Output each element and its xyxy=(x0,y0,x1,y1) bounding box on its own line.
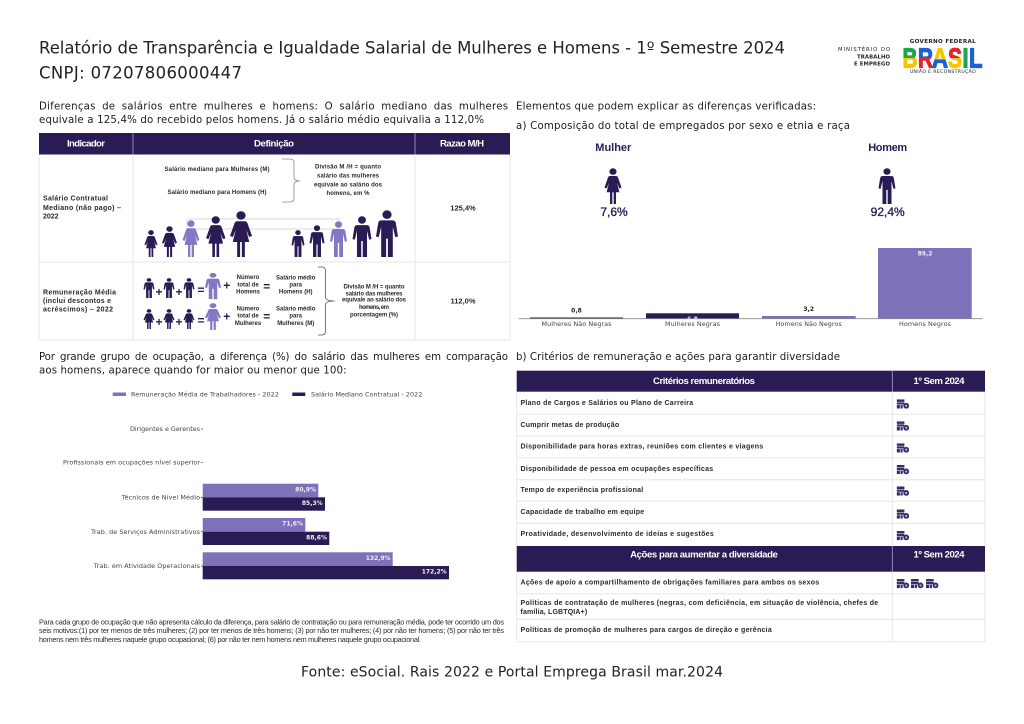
action rows: Políticas de promoção de mulheres para cargos de direção e gerência xyxy=(520,627,772,634)
definition: divisão M/H: salário das mulheres xyxy=(317,174,380,180)
row label: remuneração média: (inclui descontos e xyxy=(43,298,111,305)
panel: tabela de indicadores xyxy=(39,133,510,340)
footnote: Para cada grupo de ocupação que não apresenta cálculo da diferença, para salário de contratação ou para remuneração média, pode ter ocorrido um dos xyxy=(39,618,504,626)
criteria rows: Proatividade, desenvolvimento de ideias e sugestões xyxy=(520,531,714,538)
legend: Remuneração Média de Trabalhadores - 2022 xyxy=(131,390,279,398)
brace xyxy=(318,267,334,335)
definition: salário mediano labels: Salário mediano para Homens (H) xyxy=(168,190,266,196)
footnote: seis motivos:(1) por ter menos de três mulheres; (2) por ter menos de três homens; (3) por não ter mulheres; (4) por não ter homens; (5) por não ter três xyxy=(39,626,504,635)
formula: homens: + xyxy=(175,285,183,299)
text block: diferenças de salários xyxy=(39,100,508,126)
title: Relatório de Transparência e Igualdade Salarial de Mulheres e Homens - 1º Semestre 2024 xyxy=(39,38,785,58)
formula: mulheres: Mulheres (M) xyxy=(277,321,314,327)
text block: diferenças de salários: equivale a 125,4% do recebido pelos homens. Já o salário médio equivalia a 112,0% xyxy=(39,114,484,126)
bar values: 0,8 xyxy=(571,308,582,314)
panel: homem: 92,4% xyxy=(871,205,905,219)
criteria rows: Plano de Cargos e Salários ou Plano de Carreira xyxy=(520,400,693,407)
action rows: família, LGBTQIA+) xyxy=(520,609,587,616)
formula: homens: + xyxy=(155,285,163,299)
definition: salário mediano labels xyxy=(164,167,270,196)
bar values xyxy=(571,250,932,323)
definition: divisão M/H em porcentagem xyxy=(342,284,407,318)
criteria rows: Disponibilidade para horas extras, reuniões com clientes e viagens xyxy=(520,444,763,450)
criteria rows: Tempo de experiência profissional xyxy=(520,487,643,494)
panel: mulher: 7,6% xyxy=(600,205,628,219)
panel: homem xyxy=(868,142,907,219)
bars xyxy=(530,248,972,318)
formula: mulheres: + xyxy=(155,315,163,329)
bar values: 89,2 xyxy=(918,250,932,258)
formula: homens: = xyxy=(197,283,205,297)
bars xyxy=(203,484,449,579)
logo: governo federal brasil: UNIÃO E RECONSTRUÇÃO xyxy=(910,68,976,75)
formula: mulheres: para xyxy=(289,314,303,320)
bar values: 71,6% xyxy=(282,520,303,528)
definition: divisão M/H em porcentagem: porcentagem (%) xyxy=(350,312,398,318)
category labels: Homens Não Negros xyxy=(776,320,842,328)
legend xyxy=(113,390,422,398)
definition: divisão M/H xyxy=(314,165,383,197)
action rows: Políticas de contratação de mulheres (negras, com deficiência, em situação de violência, chefes de xyxy=(520,600,878,607)
row label: remuneração média: Remuneração Média xyxy=(43,290,116,296)
formula: mulheres: = xyxy=(263,310,270,324)
definition: divisão M/H: homens, em % xyxy=(326,191,370,197)
formula: mulheres: Mulheres xyxy=(235,321,262,327)
logo: governo federal brasil: S xyxy=(948,42,962,73)
footnote: homens nem três mulheres naquele grupo ocupacional; (6) por não ter nem homens nem mulheres naquele grupo ocupacional. xyxy=(39,635,421,644)
title xyxy=(39,38,785,82)
header: ações: Ações para aumentar a diversidade xyxy=(630,550,778,560)
panel: tabela de critérios xyxy=(517,371,985,642)
header: critérios remuneratórios: 1º Sem 2024 xyxy=(914,376,965,387)
formula: homens: + xyxy=(223,278,230,292)
category labels: Mulheres Negras xyxy=(665,320,721,328)
bar chart: ocupação xyxy=(63,425,449,579)
bar values: 3,2 xyxy=(803,306,814,313)
action rows: Ações de apoio a compartilhamento de obrigações familiares para ambos os sexos xyxy=(520,580,819,586)
legend: Salário Mediano Contratual - 2022 xyxy=(311,390,422,398)
category labels: Técnicos de Nível Médio xyxy=(121,494,200,502)
panel: mulher: Mulher xyxy=(595,142,632,154)
formula: homens: para xyxy=(289,283,303,289)
bar values: 132,9% xyxy=(366,555,391,562)
definition: divisão M/H em porcentagem: salário das mulheres xyxy=(346,291,403,297)
logo: governo federal brasil xyxy=(902,39,982,75)
bar values: 172,2% xyxy=(422,568,447,576)
formula: homens: Número xyxy=(237,275,260,281)
value: 112,0%: 112,0% xyxy=(450,296,476,306)
header: critérios remuneratórios xyxy=(517,371,985,392)
bar values: 6,8 xyxy=(687,316,698,323)
connector between median figures xyxy=(187,219,339,229)
formula: homens: Salário médio xyxy=(276,276,316,282)
criteria rows: Cumprir metas de produção xyxy=(520,422,619,429)
panel: homem: Homem xyxy=(868,142,907,154)
row label: salário contratual: Mediano (não pago) – xyxy=(43,205,121,212)
bar values: 85,3% xyxy=(302,500,323,507)
logo: governo federal brasil: I xyxy=(962,42,968,73)
formula: mulheres: total de xyxy=(237,314,259,320)
text block: elementos: Elementos que podem explicar as diferenças verificadas: xyxy=(516,102,816,112)
heading: composição: a) Composição do total de empregados por sexo e etnia e raça xyxy=(516,121,850,132)
bar values: 88,6% xyxy=(306,534,327,542)
definition: divisão M/H: Divisão M /H = quanto xyxy=(315,165,381,171)
icons: ações xyxy=(897,579,938,588)
category labels: Mulheres Não Negras xyxy=(542,320,612,328)
formula: homens: total de xyxy=(237,283,259,289)
text block: diferenças de salários: Diferenças de salários entre mulheres e homens: O salário mediano das mulheres xyxy=(39,100,508,112)
definition: divisão M/H em porcentagem: Divisão M /H = quanto xyxy=(344,284,405,290)
icons: mulheres xyxy=(144,211,252,257)
row label: remuneração média xyxy=(43,290,116,314)
header: critérios remuneratórios: Critérios remuneratórios xyxy=(653,376,755,387)
criteria rows: Capacidade de trabalho em equipe xyxy=(520,509,644,516)
header: ações xyxy=(517,546,985,572)
category labels: Dirigentes e Gerentes xyxy=(130,425,201,433)
formula: homens: = xyxy=(263,280,270,294)
definition: salário mediano labels: Salário mediano para Mulheres (M) xyxy=(164,167,270,173)
row label: salário contratual: 2022 xyxy=(43,214,59,220)
bar chart: composição xyxy=(519,248,983,328)
value: 125,4%: 125,4% xyxy=(450,204,476,212)
formula: mulheres: + xyxy=(223,310,230,324)
logo: ministério do trabalho e emprego: E EMPREGO xyxy=(854,62,890,68)
icons: homens xyxy=(292,210,398,257)
header: ações: 1º Sem 2024 xyxy=(914,550,965,560)
criteria rows xyxy=(520,400,763,538)
row label: remuneração média: acréscimos) – 2022 xyxy=(43,306,113,314)
logo: governo federal brasil: A xyxy=(932,42,948,73)
category labels: Trab. em Atividade Operacionais xyxy=(93,562,201,570)
source: Fonte: eSocial. Rais 2022 e Portal Emprega Brasil mar.2024 xyxy=(301,664,723,680)
footnote xyxy=(39,618,504,644)
logo: ministério do trabalho e emprego xyxy=(838,45,890,68)
formula: mulheres: Salário médio xyxy=(276,306,316,312)
action rows xyxy=(520,580,878,634)
table header: Definição xyxy=(254,138,294,150)
formula: homens xyxy=(144,273,316,299)
row label: salário contratual: Salário Contratual xyxy=(43,196,108,202)
bar values xyxy=(282,486,447,576)
category labels: Profissionais em ocupações nível superior xyxy=(63,458,200,466)
title: CNPJ: 07207806000447 xyxy=(39,64,242,82)
category labels xyxy=(542,320,952,328)
logo: governo federal brasil: B xyxy=(902,42,918,73)
definition: divisão M/H: equivale ao salário dos xyxy=(314,182,383,188)
formula: mulheres: Número xyxy=(237,306,260,312)
category labels xyxy=(63,425,201,570)
table header xyxy=(39,133,510,154)
logo: governo federal brasil: L xyxy=(969,42,982,73)
definition: divisão M/H em porcentagem: equivale ao salário dos xyxy=(342,298,407,304)
icons: critérios xyxy=(897,399,908,540)
heading: por grande grupo: aos homens, aparece quando for maior ou menor que 100: xyxy=(39,366,346,376)
brace xyxy=(282,159,300,202)
row label: salário contratual xyxy=(43,196,121,220)
category labels: Trab. de Serviços Administrativos xyxy=(90,528,201,536)
formula: mulheres: = xyxy=(197,314,205,328)
formula: mulheres xyxy=(144,303,316,330)
table header: Indicador xyxy=(67,138,105,150)
formula: homens: Homens xyxy=(236,290,260,296)
logo: governo federal brasil: GOVERNO FEDERAL xyxy=(910,39,976,45)
definition: divisão M/H em porcentagem: homens, em xyxy=(359,305,389,311)
formula: mulheres: + xyxy=(175,315,183,329)
heading: critérios: b) Critérios de remuneração e ações para garantir diversidade xyxy=(516,351,840,363)
heading: por grande grupo xyxy=(39,351,508,376)
logo: ministério do trabalho e emprego: MINISTÉRIO DO xyxy=(838,45,890,53)
formula: homens: Homens (H) xyxy=(279,290,313,296)
logo: ministério do trabalho e emprego: TRABALHO xyxy=(857,54,890,60)
heading: por grande grupo: Por grande grupo de ocupação, a diferença (%) do salário das mulheres em comparação xyxy=(39,351,508,363)
criteria rows: Disponibilidade de pessoa em ocupações específicas xyxy=(520,466,713,473)
bar values: 80,9% xyxy=(295,486,316,494)
category labels: Homens Negros xyxy=(899,320,952,328)
logo: governo federal brasil: R xyxy=(918,42,933,73)
table header: Razao M/H xyxy=(440,138,484,150)
panel: mulher xyxy=(595,142,632,219)
